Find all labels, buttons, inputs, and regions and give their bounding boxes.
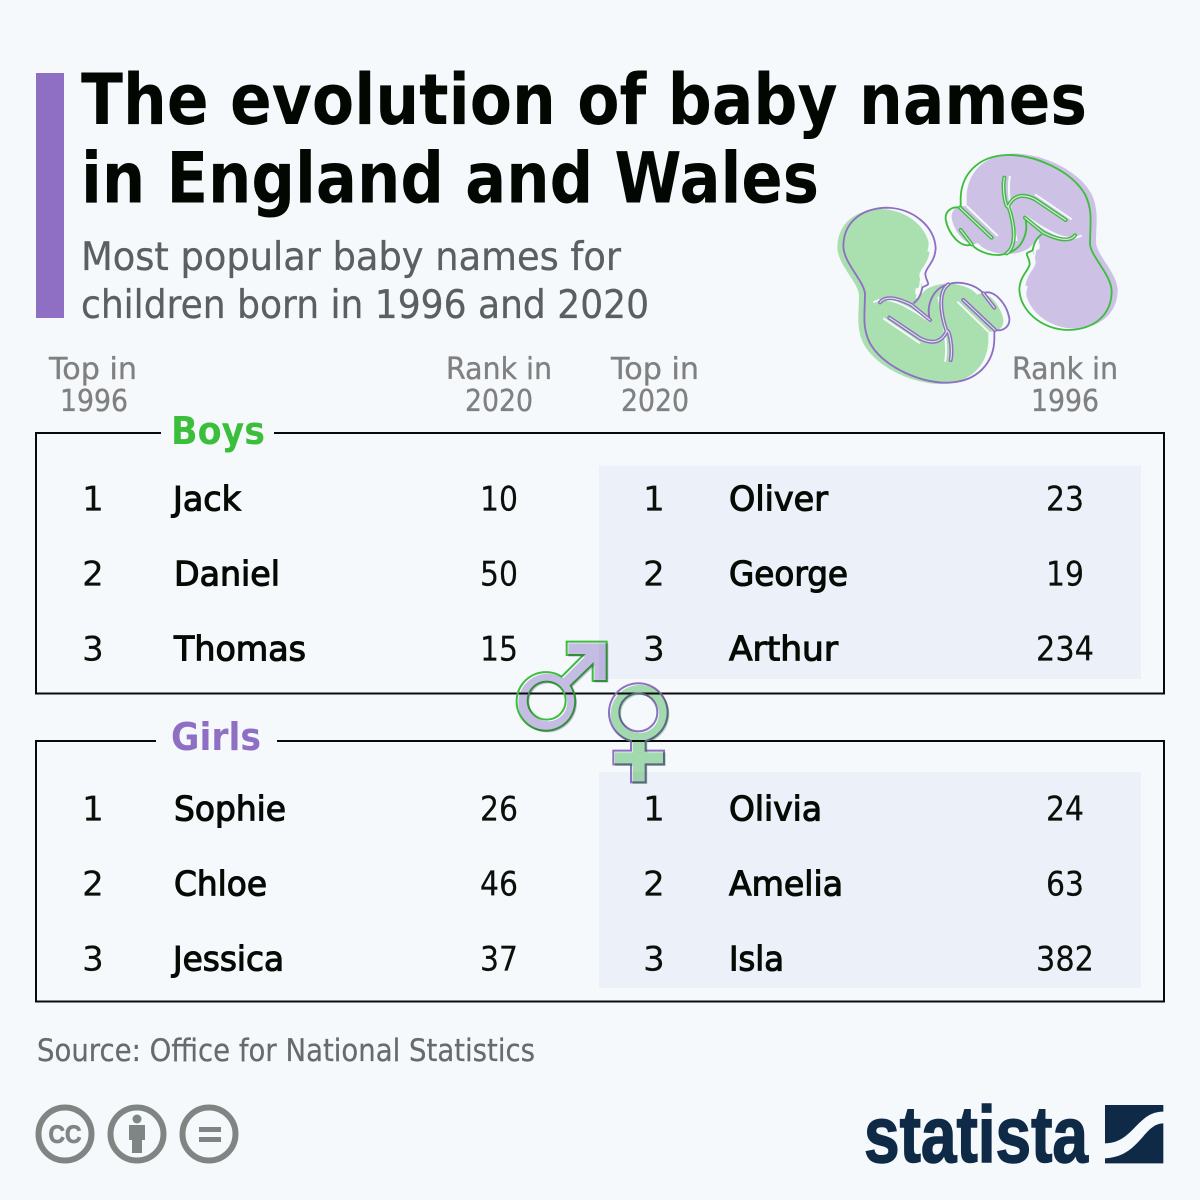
girls row 3: 3 (82, 940, 104, 980)
icon: no derivatives (182, 1108, 236, 1160)
panel: girls (36, 715, 1164, 1002)
icon: two babies (837, 154, 1118, 384)
panel: boys (36, 409, 1164, 694)
boys row 1: 1 (82, 480, 104, 520)
boys row 3: Arthur (729, 630, 838, 670)
column headers: Top in (610, 352, 699, 387)
icon: green baby (837, 208, 1009, 384)
title: The evolution of baby names (81, 59, 1087, 141)
column headers: Rank in (446, 352, 552, 387)
girls row 2: 2 (82, 864, 104, 904)
girls row 3: Isla (729, 940, 784, 980)
title (81, 59, 1087, 220)
icon: attribution (110, 1108, 164, 1160)
girls row 3: Jessica (171, 940, 284, 980)
girls row 2 (82, 864, 1084, 904)
boys row 2: 2 (82, 554, 104, 594)
girls frame (36, 741, 1164, 1002)
boys row 1: Oliver (729, 480, 828, 520)
boys heading: Boys (171, 409, 265, 453)
girls row 1: 24 (1046, 790, 1084, 830)
boys row 1: 1 (643, 480, 665, 520)
girls row 2: Amelia (729, 864, 843, 904)
girls highlight (599, 772, 1141, 988)
icon: purple baby (946, 154, 1118, 330)
column headers: 1996 (60, 384, 128, 419)
boys row 2: George (729, 554, 848, 594)
girls row 2: 2 (643, 864, 665, 904)
column headers: Top in (48, 352, 137, 387)
boys row 3: 15 (480, 630, 518, 670)
column headers: 2020 (465, 384, 533, 419)
boys row 3: Thomas (173, 630, 306, 670)
girls row 1: 1 (82, 790, 104, 830)
boys row 1: Jack (171, 480, 241, 520)
girls row 2: 46 (480, 864, 518, 904)
column headers: 1996 (1031, 384, 1099, 419)
icon: female symbol (609, 683, 669, 784)
girls row 2: 63 (1046, 864, 1084, 904)
boys row 3: 3 (82, 630, 104, 670)
icon: male symbol (517, 642, 608, 732)
girls heading: Girls (171, 715, 261, 759)
boys row 3: 234 (1036, 630, 1094, 670)
girls row 1: 1 (643, 790, 665, 830)
boys row 3: 3 (643, 630, 665, 670)
column headers (48, 352, 1118, 419)
girls row 3: 382 (1036, 940, 1094, 980)
boys row 2: 19 (1046, 554, 1084, 594)
subtitle: Most popular baby names for (81, 235, 622, 280)
boys row 2 (82, 554, 1084, 594)
girls row 1: 26 (480, 790, 518, 830)
title: in England and Wales (81, 138, 819, 220)
boys frame (36, 433, 1164, 694)
accent bar (36, 73, 64, 318)
boys row 1: 10 (480, 480, 518, 520)
boys row 1 (82, 480, 1084, 520)
girls row 3 (82, 940, 1094, 980)
statista logo mark (1105, 1105, 1163, 1163)
icon: creative commons (38, 1108, 92, 1160)
girls row 1: Sophie (174, 790, 286, 830)
boys row 3 (82, 630, 1094, 670)
girls row 2: Chloe (174, 864, 267, 904)
column headers: 2020 (621, 384, 689, 419)
statista wordmark: statista (864, 1090, 1088, 1179)
boys row 2: 50 (480, 554, 518, 594)
girls row 3: 37 (480, 940, 518, 980)
boys row 2: 2 (643, 554, 665, 594)
icon: creative commons: CC (48, 1121, 82, 1149)
girls row 1: Olivia (729, 790, 822, 830)
girls row 3: 3 (643, 940, 665, 980)
boys row 2: Daniel (174, 554, 280, 594)
boys highlight (599, 466, 1141, 679)
boys row 1: 23 (1046, 480, 1084, 520)
subtitle: children born in 1996 and 2020 (81, 283, 649, 328)
column headers: Rank in (1012, 352, 1118, 387)
source note: Source: Office for National Statistics (37, 1033, 535, 1069)
girls row 1 (82, 790, 1084, 830)
subtitle (81, 235, 649, 328)
